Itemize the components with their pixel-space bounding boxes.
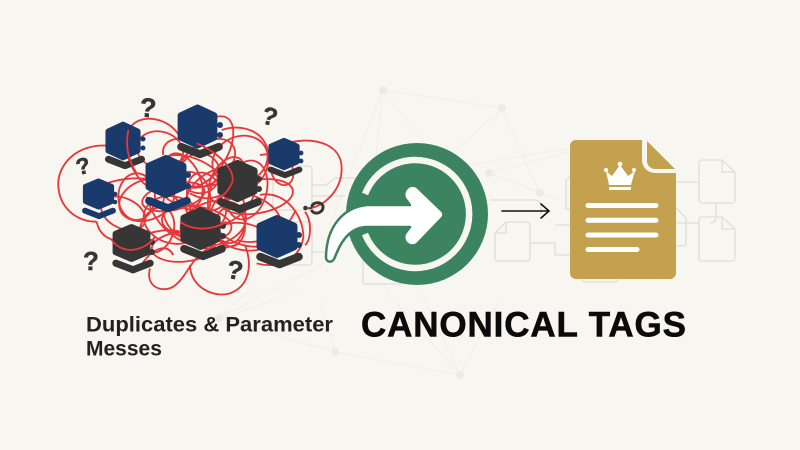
question marks: ? [225, 254, 245, 286]
icon: blue hexagon 4 [149, 158, 191, 208]
document text lines [588, 206, 656, 250]
title: canonical tags: CANONICAL TAGS [361, 306, 686, 344]
icon: blue hexagon 6 [271, 140, 303, 175]
subtitle second line: Messes [86, 338, 162, 360]
stacked hexagon icons [85, 108, 303, 270]
icon: broken link knot [303, 203, 323, 213]
question marks: ? [83, 246, 99, 276]
icon: green canonical arrow circle [326, 143, 488, 285]
icon: dark hexagon 5 [221, 163, 262, 209]
background document outlines [273, 160, 735, 284]
subtitle: duplicates and parameter messes: Duplicates & Parameter [86, 314, 333, 336]
icon: dark hexagon 8 [116, 227, 155, 270]
red tangled loops [58, 116, 342, 294]
red loops crossing over hexagons [112, 130, 310, 250]
icon: gold canonical document [570, 140, 676, 279]
icon: blue hexagon 1 [108, 125, 146, 166]
arrow to canonical document [502, 204, 549, 218]
icon: crown [604, 162, 636, 190]
question marks [73, 92, 281, 286]
icon: dark hexagon 7 [184, 210, 226, 256]
icon: blue hexagon 9 [260, 218, 302, 264]
question marks: ? [259, 101, 281, 132]
question marks: ? [138, 92, 158, 124]
icon: blue hexagon 3 [85, 181, 117, 216]
question marks: ? [73, 152, 93, 180]
icon: blue hexagon 2 [181, 108, 223, 154]
